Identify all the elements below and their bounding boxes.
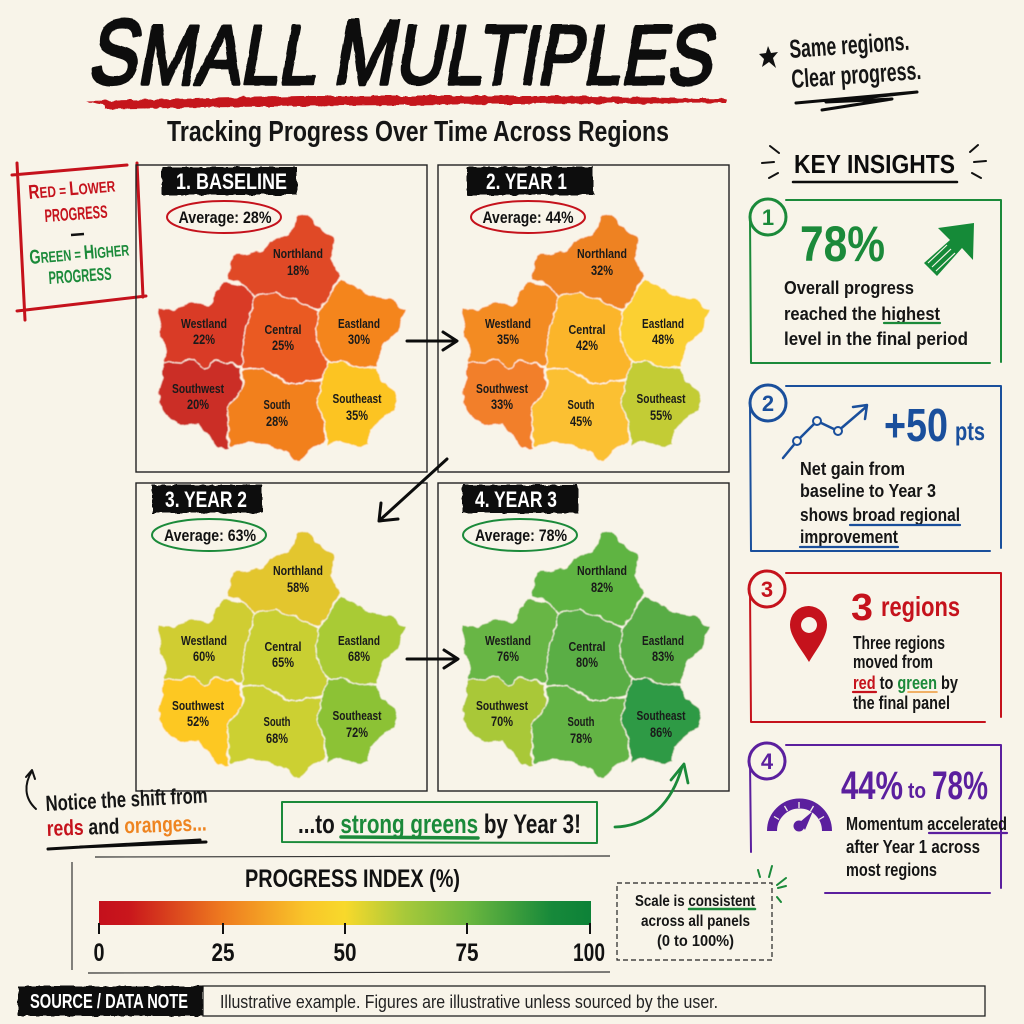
average: 63%: Average: 63% — [164, 526, 256, 545]
number 1: 1 — [762, 205, 774, 230]
map: year 3: 76% — [497, 648, 519, 664]
number 2 — [750, 385, 786, 421]
map: year 2: 52% — [187, 713, 209, 729]
map: year 3: Westland — [485, 634, 531, 648]
map: year 2: Central — [264, 640, 302, 654]
number 3 — [749, 571, 785, 607]
text — [784, 278, 968, 349]
map: baseline: Northland — [273, 247, 323, 261]
map: year 1: South — [568, 398, 594, 412]
map: year 3: Southwest — [476, 699, 529, 713]
map: year 3: 86% — [650, 724, 672, 740]
map: year 3: 78% — [570, 730, 592, 746]
map: year 3: Southeast — [636, 709, 686, 723]
map: baseline — [157, 213, 405, 462]
stat: +50 pts: +50 — [884, 399, 948, 451]
map: year 3: South — [568, 715, 594, 729]
map: year 2: 60% — [193, 648, 215, 664]
legend: red and green — [12, 163, 146, 320]
insight 2 — [750, 385, 1001, 551]
stat: +50 pts: pts — [955, 416, 985, 446]
stat: 78%: 78% — [800, 216, 885, 272]
stat: 3 regions — [851, 587, 960, 629]
text: Net gain from — [800, 459, 905, 479]
map: baseline: 20% — [187, 396, 209, 412]
ticks and labels: 100 — [573, 939, 605, 967]
stat: 44% to 78%: 78% — [932, 764, 988, 808]
map: year 1 — [461, 213, 709, 462]
map: year 1: 32% — [591, 262, 613, 278]
average: 44%: Average: 44% — [482, 208, 574, 227]
stat: 44% to 78% — [841, 764, 988, 808]
map: year 1: Eastland — [642, 317, 684, 331]
map: baseline: South — [264, 398, 290, 412]
annotation: notice the shift: reds and oranges... — [46, 810, 207, 841]
number 2: 2 — [762, 391, 774, 416]
map: year 2: Eastland — [338, 634, 380, 648]
arrow: baseline to year 1 — [407, 332, 457, 350]
map: baseline: Southeast — [332, 392, 382, 406]
small arrow up — [26, 770, 36, 809]
map: year 2: 68% — [348, 648, 370, 664]
text — [800, 459, 960, 547]
map: year 3: Eastland — [642, 634, 684, 648]
map: year 2: South — [264, 715, 290, 729]
ticks and labels: 0 — [94, 939, 104, 967]
map: baseline: 30% — [348, 331, 370, 347]
insight 1 — [750, 199, 1001, 363]
number 3: 3 — [761, 577, 773, 602]
map: year 2: Southeast — [332, 709, 382, 723]
map: year 1: Central — [568, 323, 606, 337]
icon: map pin — [790, 606, 827, 662]
legend: red and green: PROGRESS — [48, 264, 112, 288]
average: 78% — [463, 519, 577, 551]
map: year 3: Central — [568, 640, 606, 654]
note: scale is consistent: Scale is consistent — [635, 893, 756, 910]
panel: baseline — [136, 165, 427, 472]
map: baseline: 25% — [272, 337, 294, 353]
source note: Illustrative example. Figures are illustrative unless sourced by the user. — [220, 992, 718, 1012]
ticks and labels: 25 — [212, 939, 235, 967]
text: the final panel — [853, 693, 950, 713]
text — [853, 633, 958, 713]
colour bar — [99, 901, 591, 925]
map: year 1: Southeast — [636, 392, 686, 406]
text: level in the final period — [784, 329, 968, 349]
ticks and labels: 50 — [334, 939, 356, 967]
badge: year 2: 3. YEAR 2 — [165, 487, 247, 512]
stat: 3 regions: regions — [881, 591, 960, 622]
badge: year 1: 2. YEAR 1 — [486, 169, 567, 194]
legend title: PROGRESS INDEX (%) — [245, 865, 460, 893]
heading: key insights — [762, 145, 986, 182]
map: baseline: Southwest — [172, 382, 225, 396]
text: shows broad regional — [800, 505, 960, 525]
text: Three regions — [853, 633, 945, 653]
subtitle: Tracking Progress Over Time Across Regions — [167, 116, 669, 148]
map: year 1: 45% — [570, 413, 592, 429]
number 1 — [750, 199, 786, 235]
note: scale is consistent — [617, 866, 786, 960]
map: year 3: 82% — [591, 579, 613, 595]
legend: progress index — [72, 856, 610, 973]
map: baseline: 22% — [193, 331, 215, 347]
stat: 44% to 78%: to — [908, 778, 926, 803]
average: 44% — [471, 201, 585, 233]
ticks and labels: 75 — [456, 939, 479, 967]
icon: line chart — [783, 405, 867, 458]
text: most regions — [846, 860, 937, 880]
icon: gauge — [772, 802, 827, 832]
legend: red and green: GREEN = HIGHER — [29, 238, 130, 269]
map: year 1: Westland — [485, 317, 531, 331]
map: year 2: Southwest — [172, 699, 225, 713]
icon: star — [759, 46, 778, 68]
map: baseline: Westland — [181, 317, 227, 331]
note: scale is consistent: (0 to 100%) — [657, 933, 734, 950]
legend: red and green: RED = LOWER — [28, 174, 116, 204]
text: moved from — [853, 652, 933, 672]
average: 28% — [167, 201, 281, 233]
map: year 1: 55% — [650, 407, 672, 423]
map: year 2: Northland — [273, 564, 323, 578]
map: year 1: Northland — [577, 247, 627, 261]
title: SMALL MULTIPLES — [84, 1, 726, 104]
badge: year 3: 4. YEAR 3 — [475, 487, 557, 512]
map: year 2: 68% — [266, 730, 288, 746]
map: baseline: Eastland — [338, 317, 380, 331]
stat: 3 regions: 3 — [851, 587, 873, 629]
map: baseline: Central — [264, 323, 302, 337]
text: baseline to Year 3 — [800, 481, 936, 501]
map: year 2 — [157, 530, 405, 779]
map: year 3: 83% — [652, 648, 674, 664]
callout: strong greens: ...to strong greens by Year 3! — [298, 809, 581, 839]
panel: year 1 — [438, 165, 729, 472]
map: year 3 — [461, 530, 709, 779]
number 4: 4 — [761, 749, 774, 774]
insight 3 — [749, 571, 1001, 722]
map: year 3: 80% — [576, 654, 598, 670]
arrow: curved green — [615, 764, 688, 827]
source note: SOURCE / DATA NOTE — [30, 991, 188, 1013]
map: year 1: 35% — [497, 331, 519, 347]
text: after Year 1 across — [846, 837, 980, 857]
side note: same regions: Same regions. — [788, 26, 910, 64]
panel: year 3 — [438, 483, 729, 791]
side note: same regions: Clear progress. — [790, 55, 922, 94]
annotation: notice the shift — [26, 770, 208, 849]
map: year 2: 72% — [346, 724, 368, 740]
heading: key insights: KEY INSIGHTS — [794, 149, 955, 179]
legend: red and green: PROGRESS — [44, 202, 108, 226]
panel: year 2 — [136, 483, 427, 791]
map: year 2: 65% — [272, 654, 294, 670]
ticks and labels — [94, 923, 605, 967]
map: year 3: Northland — [577, 564, 627, 578]
number 4 — [749, 743, 785, 779]
arrow: year 1 to year 2 — [379, 459, 447, 521]
text — [846, 814, 1007, 880]
source note — [18, 986, 985, 1016]
icon: arrow up right — [924, 223, 974, 276]
title underline — [86, 96, 727, 109]
text: Overall progress — [784, 278, 914, 298]
text: improvement — [800, 527, 898, 547]
text: reached the highest — [784, 304, 940, 324]
annotation: notice the shift: Notice the shift from — [45, 783, 208, 816]
text: red to green by — [853, 673, 958, 693]
map: year 1: 33% — [491, 396, 513, 412]
side note: same regions — [759, 26, 922, 110]
note: scale is consistent: across all panels — [641, 913, 750, 930]
average: 78%: Average: 78% — [475, 526, 567, 545]
stat: 44% to 78%: 44% — [841, 764, 903, 808]
map: year 2: Westland — [181, 634, 227, 648]
badge: baseline: 1. BASELINE — [176, 169, 287, 194]
map: baseline: 35% — [346, 407, 368, 423]
map: year 2: 58% — [287, 579, 309, 595]
average: 63% — [152, 519, 266, 551]
callout: strong greens — [282, 802, 597, 843]
map: year 3: 70% — [491, 713, 513, 729]
arrow: year 2 to year 3 — [407, 650, 458, 668]
insight 4 — [749, 743, 1007, 893]
map: baseline: 28% — [266, 413, 288, 429]
map: baseline: 18% — [287, 262, 309, 278]
map: year 1: Southwest — [476, 382, 529, 396]
map: year 1: 42% — [576, 337, 598, 353]
map: year 1: 48% — [652, 331, 674, 347]
average: 28%: Average: 28% — [178, 208, 272, 227]
